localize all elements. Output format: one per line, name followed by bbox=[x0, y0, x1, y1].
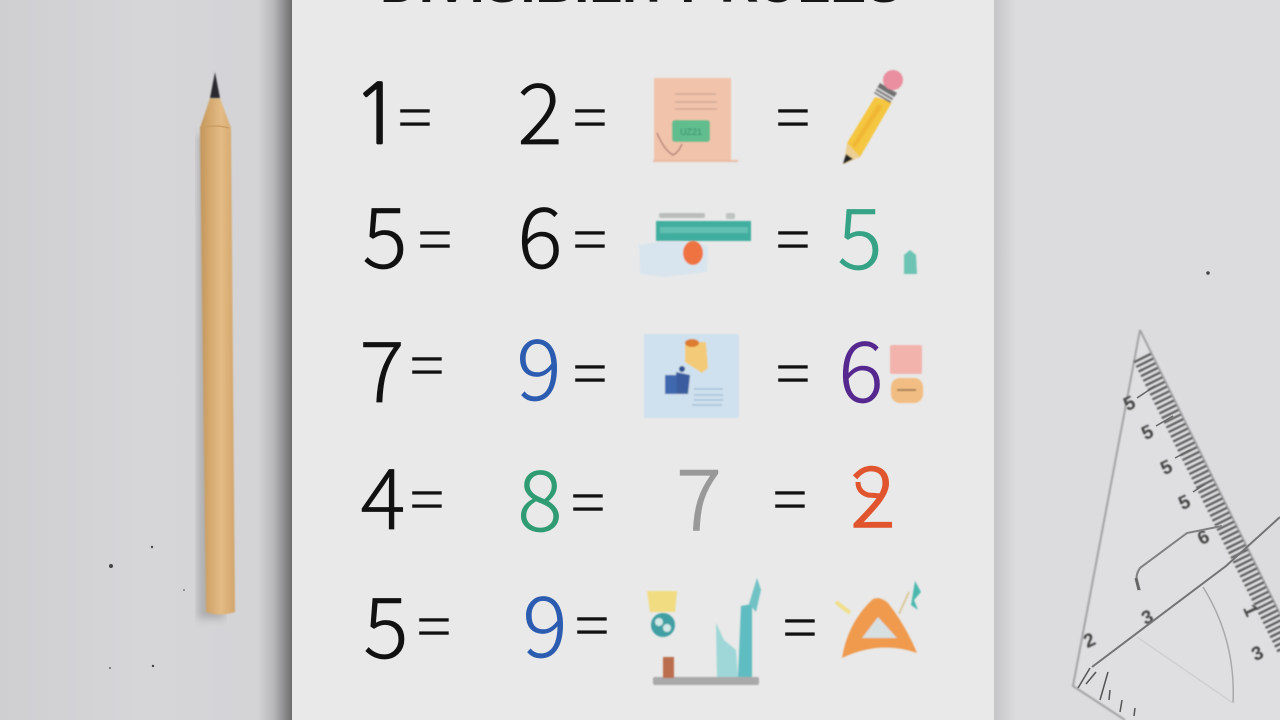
row 4: 8 bbox=[518, 435, 562, 556]
row 3: = bbox=[775, 344, 811, 403]
ruler labels bbox=[1080, 392, 1267, 666]
ruler labels: 3 bbox=[1138, 606, 1157, 630]
icon: note with green label: UZ21 bbox=[680, 127, 702, 137]
row 5: 5 bbox=[364, 562, 408, 683]
ruler labels: 5 bbox=[1157, 456, 1176, 480]
icon: pink and orange blocks bbox=[890, 345, 923, 403]
icon: teal ruler over note bbox=[639, 213, 751, 277]
row 4: = bbox=[772, 470, 808, 529]
row 1: 1 bbox=[352, 73, 402, 157]
ruler labels: 2 bbox=[1080, 629, 1099, 653]
row 2 bbox=[363, 172, 917, 294]
row 2: 6 bbox=[518, 172, 562, 293]
row 1: 2 bbox=[518, 48, 562, 169]
row 3: 7 bbox=[360, 306, 404, 427]
row 5: = bbox=[782, 598, 818, 657]
icon: blue card with figure bbox=[644, 334, 739, 418]
row 3: = bbox=[409, 336, 445, 395]
row 4: = bbox=[409, 470, 445, 529]
row 2: 5 bbox=[838, 173, 882, 294]
ruler labels: 5 bbox=[1138, 421, 1157, 445]
icon: note with green label bbox=[653, 78, 738, 161]
transparent set square with ruler bbox=[1073, 330, 1280, 720]
ruler ticks bbox=[1142, 357, 1280, 650]
paper sheet bbox=[292, 0, 994, 720]
row 2: = bbox=[775, 210, 811, 269]
row 3: 9 bbox=[517, 304, 561, 425]
row 2: 5 bbox=[363, 172, 407, 293]
ruler labels: 5 bbox=[1120, 392, 1139, 416]
row 4: 4 bbox=[361, 433, 405, 554]
row 1: = bbox=[397, 88, 433, 147]
icon: science towers bbox=[647, 578, 761, 685]
ruler labels: 1 bbox=[1238, 601, 1262, 620]
icon: small teal jar bbox=[904, 250, 917, 274]
row 4: = bbox=[570, 473, 606, 532]
row 5: 9 bbox=[523, 561, 567, 682]
row 3: = bbox=[572, 344, 608, 403]
row 2: = bbox=[417, 210, 453, 269]
row 4 bbox=[361, 431, 895, 556]
ruler labels: 3 bbox=[1248, 642, 1267, 666]
row 5: = bbox=[416, 597, 452, 656]
ruler labels: 6 bbox=[1194, 526, 1213, 550]
red two with closed loop: 2 bbox=[851, 431, 895, 552]
row 2: = bbox=[572, 210, 608, 269]
row 5: = bbox=[574, 596, 610, 655]
row 1: = bbox=[775, 88, 811, 147]
row 3: 6 bbox=[839, 306, 883, 427]
row 5 bbox=[364, 561, 921, 685]
pencil bbox=[198, 72, 235, 619]
row 1: = bbox=[572, 88, 608, 147]
ruler labels: 5 bbox=[1175, 491, 1194, 515]
row 1 bbox=[352, 48, 903, 169]
specks on desk bbox=[109, 271, 1210, 669]
row 4: 7 bbox=[677, 434, 721, 555]
icon: yellow pencil bbox=[843, 70, 903, 164]
row 3 bbox=[360, 304, 923, 427]
icon: orange set square bbox=[836, 581, 921, 658]
